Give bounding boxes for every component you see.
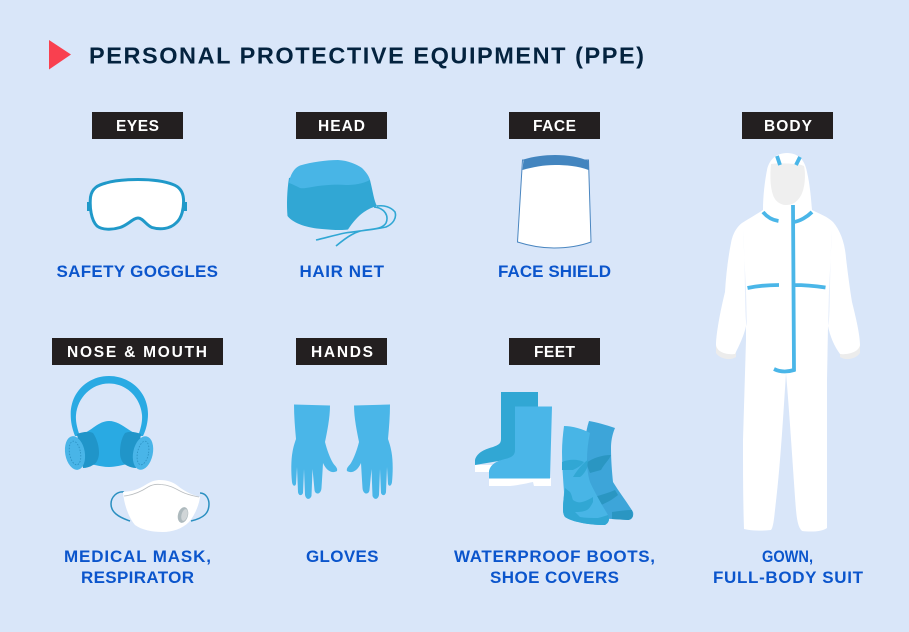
heading: nose and mouth — [52, 338, 223, 365]
heading: hands — [296, 338, 387, 365]
panel: feet — [454, 338, 655, 587]
icon: medical mask — [111, 480, 209, 532]
gown cuffs — [716, 345, 860, 359]
panel: hands — [291, 338, 393, 566]
heading: eyes — [92, 112, 183, 139]
label: gown: GOWN, — [762, 547, 813, 566]
heading: head: HEAD — [318, 118, 365, 135]
icon: waterproof boots — [475, 392, 552, 486]
back cover — [575, 421, 633, 520]
heading: body: BODY — [764, 118, 813, 135]
gown face opening — [770, 163, 805, 205]
panel: body — [713, 112, 864, 587]
label: waterproof boots, shoe covers — [454, 547, 655, 587]
icon: gown, full-body suit — [716, 153, 860, 532]
icon: face shield — [518, 155, 591, 248]
heading: feet — [509, 338, 600, 365]
label: waterproof boots, shoe covers: SHOE COVERS — [490, 568, 619, 587]
title: PERSONAL PROTECTIVE EQUIPMENT (PPE) — [89, 42, 644, 68]
panel: face — [498, 112, 611, 281]
icon: title arrow — [49, 40, 71, 70]
heading: face — [509, 112, 600, 139]
heading: nose and mouth: NOSE & MOUTH — [67, 344, 207, 361]
panel: eyes — [56, 112, 218, 281]
label: waterproof boots, shoe covers: WATERPROOF BOOTS, — [454, 547, 655, 566]
label: gloves: GLOVES — [306, 547, 378, 566]
label: gown: FULL-BODY SUIT — [713, 568, 864, 587]
label: gown — [713, 547, 864, 587]
label: medical mask, respirator: RESPIRATOR — [81, 568, 194, 587]
icon: safety goggles — [87, 180, 187, 229]
heading: face: FACE — [533, 118, 576, 135]
heading: head — [296, 112, 387, 139]
gown shading — [743, 230, 832, 326]
gown silhouette — [716, 153, 860, 532]
gown blue tape — [748, 156, 826, 372]
label: hair net: HAIR NET — [300, 262, 385, 281]
label: medical mask, respirator: MEDICAL MASK, — [64, 547, 211, 566]
icon: hair net — [287, 160, 396, 246]
label: medical mask, respirator — [64, 547, 211, 587]
icon: gloves — [291, 404, 393, 499]
panel: head — [287, 112, 396, 281]
heading: hands: HANDS — [311, 344, 373, 361]
label: face shield: FACE SHIELD — [498, 262, 611, 281]
label: safety goggles: SAFETY GOGGLES — [56, 262, 218, 281]
panel: nose and mouth — [52, 338, 223, 587]
heading: feet: FEET — [534, 344, 576, 361]
heading: eyes: EYES — [116, 118, 159, 135]
icon: shoe covers — [562, 421, 633, 525]
heading: body — [742, 112, 833, 139]
icon: respirator — [62, 376, 156, 472]
front cover — [562, 426, 609, 525]
